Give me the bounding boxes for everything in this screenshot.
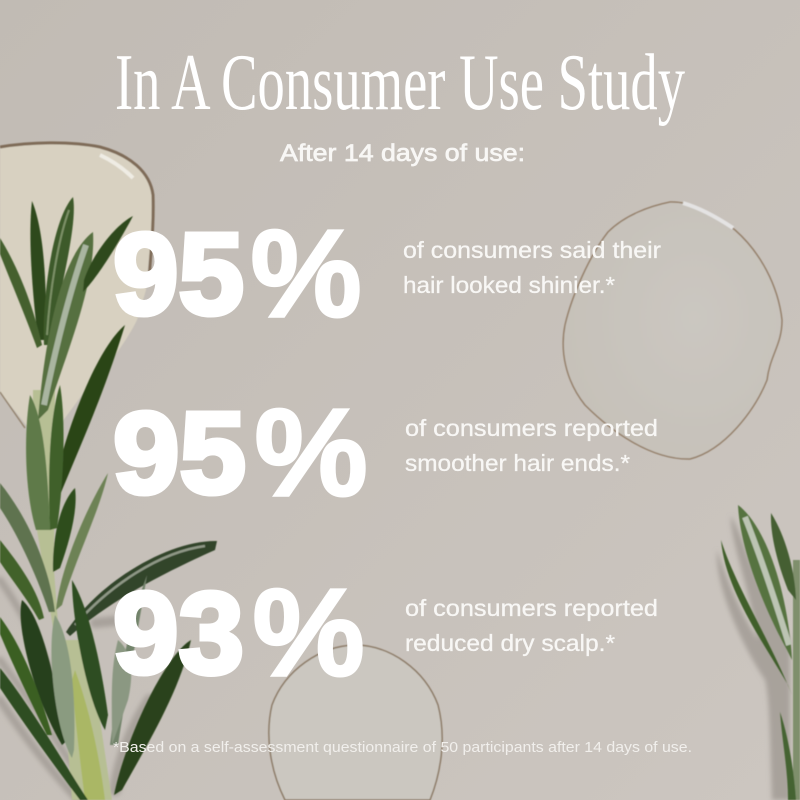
leaf: dark centre: [72, 580, 108, 730]
stem: [32, 390, 112, 800]
leaf: dark textured: [21, 600, 68, 745]
leaf: behind digit: [110, 575, 147, 745]
number: 93: [113, 568, 244, 698]
leaf: silver: [738, 505, 792, 660]
stat 1: [113, 207, 661, 341]
gel blob: right: [563, 202, 782, 459]
footnote: *Based on a self-assessment questionnaire of 50 participants after 14 days of use.: [113, 740, 692, 756]
number: %: [253, 566, 364, 700]
plant shadows: left sprig: [0, 580, 150, 800]
leaf: silver wide: [38, 232, 93, 420]
description: of consumers said their: [403, 237, 661, 263]
rosemary sprig: left: [0, 197, 217, 800]
stat 2: [113, 386, 658, 520]
number: [113, 207, 361, 341]
number: %: [255, 386, 367, 520]
leaf: left lower: [0, 540, 44, 620]
rosemary sprig: right: [721, 505, 800, 800]
leaf: left arched: [0, 483, 55, 612]
leaf: long grey arching: [66, 541, 217, 636]
number: 95: [113, 388, 246, 518]
number: %: [251, 207, 361, 341]
leaf: bottom diagonal: [0, 668, 88, 800]
subtitle: After 14 days of use:: [280, 140, 525, 167]
leaf: rear: [771, 513, 796, 600]
leaf: long dark right: [54, 325, 125, 495]
description: smoother hair ends.*: [405, 450, 630, 476]
leaf: pale upper right: [56, 473, 108, 610]
description: reduced dry scalp.*: [405, 630, 615, 656]
leaf: dark needle top: [30, 201, 46, 340]
leaf: mid cluster: [26, 395, 50, 530]
number: [113, 566, 364, 700]
gel blob: bottom: [269, 645, 442, 800]
leaf: left needle: [0, 238, 42, 348]
stat 3: [113, 566, 658, 700]
description: of consumers reported: [405, 415, 658, 441]
description: of consumers reported: [405, 595, 658, 621]
number: 95: [113, 209, 244, 339]
gel blob: top left: [0, 143, 153, 430]
leaf: dark small: [53, 488, 76, 572]
description: hair looked shinier.*: [403, 272, 615, 298]
leaf: silver centre: [51, 615, 74, 758]
leaf: bottom: [780, 712, 796, 800]
stem: [793, 560, 800, 800]
plant shadows: right sprig: [717, 516, 790, 800]
leaf: top centre: [44, 197, 74, 345]
leaf: right thin: [83, 216, 133, 292]
number: [113, 386, 367, 520]
leaf: lower right dark: [114, 640, 191, 795]
leaf: left diagonal: [0, 617, 52, 735]
leaf: thin left: [721, 540, 792, 695]
